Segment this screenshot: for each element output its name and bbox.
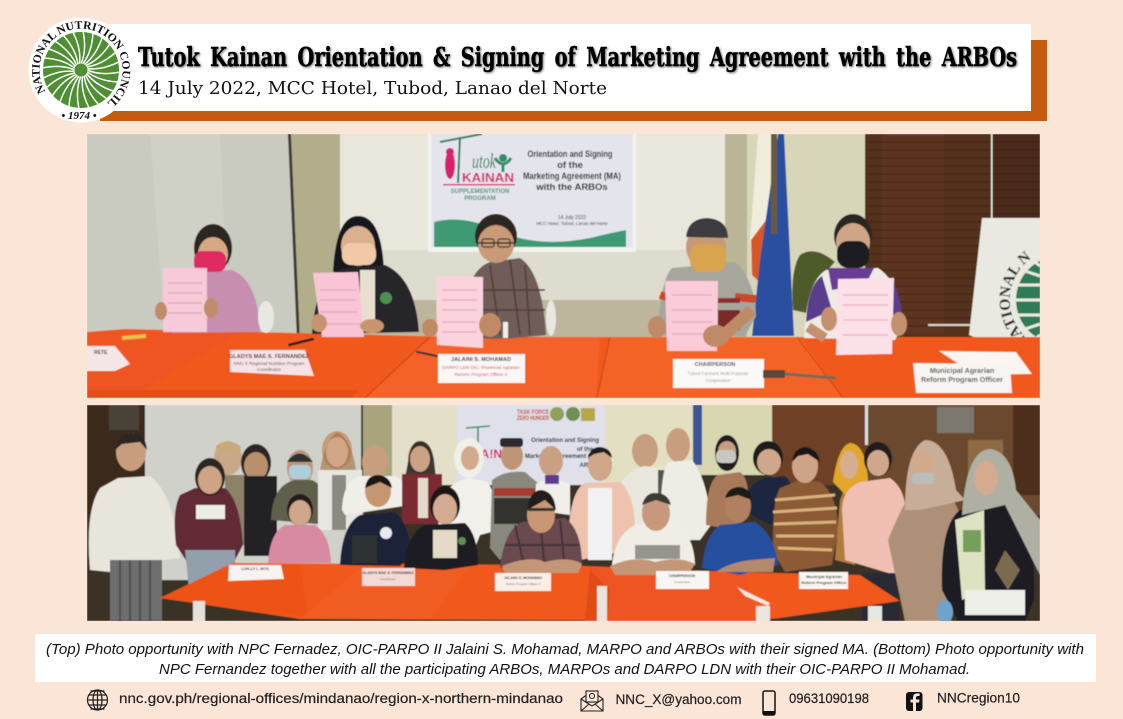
person 2 (311, 216, 419, 337)
icon: envelope (581, 691, 603, 711)
place cards: Municipal Agrarian (930, 366, 994, 375)
place cards: CHAIRPERSON (695, 362, 735, 368)
place cards (87, 346, 1032, 393)
person 5 (804, 214, 907, 355)
logo: National Nutrition Council seal: NATIONAL NUTRITION COUNCIL (32, 21, 130, 106)
place cards: Municipal Agrarian (806, 574, 842, 579)
place cards: CHAIRPERSON (669, 574, 696, 578)
place cards: Coordinator (257, 367, 281, 372)
place cards: NNC X Regional Nutrition Program (234, 361, 305, 366)
event banner: utok (472, 149, 496, 173)
room backdrop: of the (577, 447, 594, 453)
place cards: Cooperative (674, 580, 690, 584)
place cards: Reform Program Officer II (506, 582, 540, 586)
event banner: SUPPLEMENTATION (451, 189, 509, 195)
caption: (Top) Photo opportunity with NPC Fernadez, OIC-PARPO II Jalaini S. Mohamad, MARPO and ARBOs with their signed MA. (Bottom) Photo opportunity with (46, 641, 1084, 658)
place cards: Coordinator (380, 577, 396, 581)
event banner (428, 134, 636, 252)
place cards: Reform Program Officer (801, 580, 847, 585)
place cards: RETE (94, 350, 108, 356)
room backdrop: KA!N (472, 447, 502, 461)
website: nnc.gov.ph/regional-offices/mindanao/region-x-northern-mindanao (119, 691, 563, 706)
NNC flag (968, 217, 1040, 338)
NNC flag: NATIONAL N (998, 250, 1031, 338)
person 3 (422, 214, 556, 348)
caption: NPC Fernandez together with all the participating ARBOs, MARPOs and DARPO LDN with their OIC-PARPO II Mohamad. (159, 661, 970, 678)
event banner: of the (557, 160, 583, 171)
event banner: PROGRAM (464, 196, 496, 202)
room backdrop: ZERO HUNGER (517, 416, 549, 422)
subtitle: 14 July 2022, MCC Hotel, Tubod, Lanao del Norte (138, 78, 607, 99)
place cards: Cooperative (706, 378, 731, 383)
event banner: Marketing Agreement (MA) (523, 171, 621, 182)
standing back row (214, 428, 795, 560)
event banner: 14 July 2022 (558, 215, 586, 221)
person 1 (155, 224, 274, 333)
room backdrop: ARBOs (579, 463, 601, 469)
icon: phone (763, 691, 775, 715)
room backdrop: Marketing Agreement (MA) (525, 454, 601, 460)
place cards: JALAINI S. MOHAMAD (451, 357, 511, 363)
icon: globe (88, 690, 108, 710)
place cards: JALAINI S. MOHAMAD (504, 576, 543, 580)
email: NNC_X@yahoo.com (616, 692, 742, 707)
photo: signing panel holding the marketing agreement (87, 134, 1040, 398)
facebook handle: NNCregion10 (937, 690, 1020, 706)
Philippine flag (750, 134, 794, 336)
logo: National Nutrition Council seal: • 1974 • (61, 110, 97, 122)
event banner: MCC Hotel, Tubod, Lanao del Norte (536, 221, 608, 226)
room backdrop: TASK FORCE (517, 410, 549, 416)
header banner (100, 24, 1047, 121)
seated front row (268, 475, 778, 575)
place cards: GLADYS MAE S. FERNANDEZ (229, 354, 310, 360)
caption (35, 634, 1096, 682)
place cards: LORLLY L. MITE (241, 567, 269, 571)
place cards: Reform Program Officer II (455, 372, 507, 377)
table (87, 329, 1040, 398)
wall backdrop (87, 134, 1040, 338)
phone number: 09631090198 (789, 691, 869, 706)
place cards: DARPO LDN OIC- Provincial Agrarian (442, 365, 520, 370)
icon: facebook (906, 692, 922, 711)
event banner: KAINAN (462, 170, 514, 185)
place cards: GLADYS MAE S. FERNANDEZ (362, 571, 415, 575)
table (160, 563, 900, 621)
photo: group portrait of participants (87, 405, 1040, 624)
place cards: Tubod Farmers Multi-Purpose (688, 371, 749, 376)
room backdrop: Orientation and Signing (531, 438, 599, 444)
plant (792, 251, 835, 315)
room backdrop (87, 405, 1040, 621)
place cards (228, 565, 848, 591)
front standing women (89, 433, 1040, 624)
event banner: with the ARBOs (535, 182, 608, 193)
place cards: Reform Program Officer (921, 375, 1003, 384)
event banner: Orientation and Signing (528, 149, 613, 160)
person 4 (648, 218, 756, 351)
